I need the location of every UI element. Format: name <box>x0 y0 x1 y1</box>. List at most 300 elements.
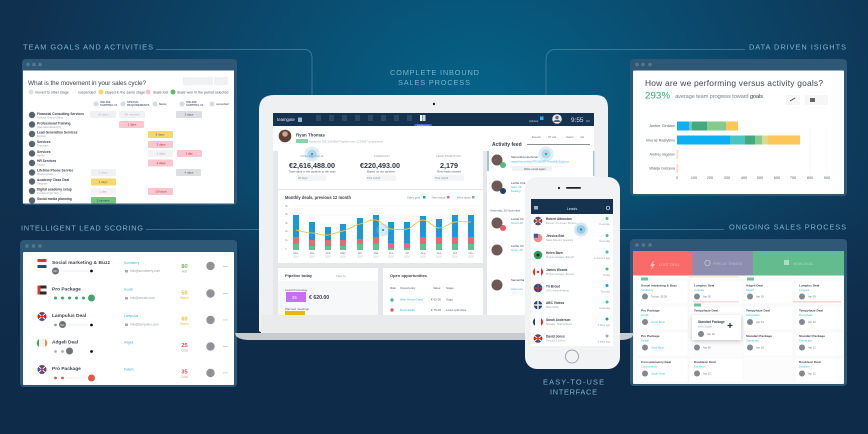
KPI panel <box>278 151 483 189</box>
laptop lid <box>259 95 608 332</box>
pipeline today card: 26 <box>292 295 297 300</box>
hotspot: chart <box>376 224 390 236</box>
stacked bar chart: Imuras Raslytinis <box>646 138 675 142</box>
stacked bar chart: 200 <box>707 176 713 180</box>
panel: ongoing sales process <box>630 239 847 386</box>
activity feed: Group 28 <box>511 221 523 225</box>
monthly deals chart: Monthly deals, previous 12 month <box>285 195 351 200</box>
deal rows: 3 days <box>157 142 166 146</box>
KPI panel: 30 days <box>298 176 308 180</box>
activity feed <box>487 126 594 315</box>
app navigation bar <box>273 113 594 128</box>
lead row: pro package lost <box>38 365 228 382</box>
monthly deals chart: 1k <box>285 238 289 242</box>
lead row: adgeli deal: Cold <box>181 348 188 352</box>
activity feed: Lucille Ch <box>511 244 524 248</box>
deal cards <box>637 276 843 382</box>
lead list: Tri Broud <box>546 284 560 288</box>
deal cards: Standart Package <box>746 334 772 338</box>
lead list: A moment ago <box>594 257 611 260</box>
lead list: Friday <box>603 274 611 277</box>
floating dragged card: Apr 19 <box>707 332 715 336</box>
deal rows: 4 days <box>99 180 108 184</box>
lead row: pro package lost: Cold <box>181 375 188 379</box>
lead list: Sarah Anderson <box>546 318 571 322</box>
monthly deals chart: Sep <box>437 251 442 255</box>
deal rows <box>29 111 202 204</box>
lead row: lampulus deal: info@lampulus.com <box>130 322 159 326</box>
lead list: Jessica Biel <box>546 234 564 238</box>
deal cards: Adgeli Deal <box>746 284 763 288</box>
floating dragged card <box>692 315 741 340</box>
deal rows: Academy Class Deal <box>37 178 69 182</box>
KPI panel: €2,616,488.00 <box>289 161 335 170</box>
hotspot: activity feed <box>538 146 554 162</box>
monthly deals chart: 2016 <box>468 256 474 258</box>
activity feed: Lucille Ch <box>511 217 524 221</box>
lead list: CFO, Asher/Kinkrest <box>546 290 569 292</box>
monthly deals chart: Jul <box>405 251 409 255</box>
deal cards: Pro Package <box>641 334 660 338</box>
KPI panel: Based on our pipeline <box>367 170 395 174</box>
phone screen <box>531 199 613 346</box>
KPI panel: 2,179 <box>440 161 458 170</box>
deal cards: Doubleon <box>799 364 811 368</box>
monthly deals chart: Jun <box>389 251 394 255</box>
open opportunities card: Sugs <box>446 298 453 302</box>
open opportunities card: Value <box>433 286 441 290</box>
legend <box>28 90 228 94</box>
stacked bar chart: 800 <box>807 176 813 180</box>
activity feed: 37 n/a <box>548 135 556 139</box>
deal cards: Lumplus <box>694 288 705 292</box>
column headers: SHIPPING #1 <box>100 103 118 107</box>
lead list: 3 days ago <box>598 324 611 327</box>
lead row: pro package: Pro Package <box>52 286 81 292</box>
hotspot: phone list <box>574 222 588 236</box>
lead row: pro package lost: Fatwin <box>124 368 134 372</box>
monthly deals chart: Jan <box>310 251 315 255</box>
monthly deals chart: New leads <box>432 196 446 200</box>
deal rows: Professional Training <box>37 122 71 126</box>
heading: ongoing sales process: ONGOING SALES PROCESS <box>729 222 846 232</box>
deal rows: 30 minutes <box>125 112 140 116</box>
deal rows: Toyseque <box>37 144 49 148</box>
activity feed: Write email again <box>524 167 546 171</box>
open opportunities card <box>383 268 483 315</box>
lead row: adgeli deal: 25 <box>181 343 188 349</box>
deal cards: Standart Package <box>799 334 825 338</box>
deal cards: Gamepack <box>799 338 813 342</box>
lead row: lampulus deal: Warm <box>180 322 189 326</box>
phone header <box>531 199 613 214</box>
heading: team goals and activities: TEAM GOALS AND ACTIVITIES <box>23 42 153 52</box>
deal cards: Apr 12 <box>808 372 816 376</box>
chart buttons <box>786 95 828 105</box>
heading: complete inbound sales process: COMPLETE INBOUND <box>390 68 479 77</box>
pipeline today card: Pipeline today <box>285 273 313 278</box>
lead row: social marketing: Sundberry <box>124 261 140 265</box>
stage header: won deal <box>753 251 844 276</box>
lead list: Speaker, Total Systems <box>546 323 573 326</box>
pipeline today card <box>278 268 378 315</box>
lead list: 5 days ago <box>598 340 611 344</box>
pipeline today card: € 620.00 <box>309 295 329 301</box>
lead list: ABC Videos <box>546 301 564 305</box>
deal rows: Fastplan <box>37 182 48 186</box>
lead row: lampulus deal <box>38 312 228 328</box>
open opportunities card: Opportunity <box>400 286 416 290</box>
column headers: SHIPPING #2 <box>186 103 204 107</box>
deal cards: Tomorr. 20:28 <box>651 294 667 298</box>
deal cards: Social marketing & Buzz <box>641 284 677 288</box>
lead list: Project manager, Beleyfit <box>546 256 574 259</box>
deal cards: Tempyhaze Deal <box>799 308 823 312</box>
column headers: cancelled <box>216 102 229 106</box>
deal rows: 10 hours <box>155 190 167 194</box>
hotspot: pipeline value <box>304 146 320 162</box>
deal rows: 3 days <box>99 170 108 174</box>
stage header: lost deal <box>633 251 692 276</box>
deal cards: Apr 12 <box>808 346 816 350</box>
monthly deals chart: 0 <box>285 247 287 251</box>
monthly deals chart: Aug <box>421 251 426 255</box>
deal rows: Bizcorp <box>37 134 46 138</box>
profile header <box>273 126 487 151</box>
monthly deals chart: 2016 <box>420 256 426 258</box>
stacked bar chart: 300 <box>724 176 730 180</box>
KPI panel: FORECAST <box>374 154 390 158</box>
heading: intelligent lead scoring: INTELLIGENT LEAD SCORING <box>21 224 143 232</box>
open opportunities card: Risk <box>390 286 396 290</box>
monthly deals chart: 2016 <box>404 256 410 258</box>
monthly deals chart: 2k <box>285 229 289 233</box>
monthly deals chart: 3k <box>285 221 289 225</box>
deal rows: 1 minutes <box>96 198 110 202</box>
monthly deals chart: Apr <box>358 251 362 255</box>
progress caption: average team progress toward goals <box>675 94 763 100</box>
profile header: Achieved 321/1234566 Pipeline won 1234567 guaranteed <box>309 140 384 144</box>
phone header: Leads <box>567 206 577 211</box>
activity feed: Activity feed <box>492 142 522 148</box>
lead list: James Woods <box>546 268 568 272</box>
KPI panel: €220,493.00 <box>360 161 400 170</box>
app navigation bar: AM <box>586 120 590 123</box>
toolbar buttons <box>183 77 228 85</box>
deal cards: Doubleon Deal <box>694 360 716 364</box>
activity feed: Gone: 28 <box>511 248 523 252</box>
deal rows: 8 days <box>156 132 165 136</box>
monthly deals chart: 2016 <box>293 256 299 258</box>
panel title: How are we performing versus activity goals? <box>645 78 823 88</box>
lead list: Banner, On Ocean, Bimono <box>546 222 577 225</box>
column headers <box>94 100 229 107</box>
deal cards: Consumatory <box>641 364 658 368</box>
activity feed: n/a <box>580 135 584 139</box>
deal cards: Sundberry <box>641 288 654 292</box>
stacked bar chart <box>646 122 830 180</box>
deal cards: Lumplus Deal <box>799 284 819 288</box>
deal cards: Doubleon <box>694 364 706 368</box>
monthly deals chart: 2016 <box>309 256 315 258</box>
heading: easy-to-use interface: EASY-TO-USE <box>543 378 604 386</box>
panel: intelligent lead scoring <box>20 240 237 387</box>
app screen <box>273 113 594 315</box>
monthly deals chart: 2016 <box>325 256 331 258</box>
profile header: Ryan Thomas <box>296 132 325 138</box>
deal cards: Apr 10 <box>808 320 816 324</box>
lead list: Yesterday <box>599 307 611 310</box>
monthly deals chart: 2016 <box>340 256 346 258</box>
deal cards: Adgeli <box>746 288 754 292</box>
deal rows: Services <box>37 150 51 154</box>
activity feed: www.com <box>511 287 524 291</box>
column headers: SPECIAL <box>127 100 139 104</box>
panel: data driven insights <box>630 59 847 196</box>
monthly deals chart: 5k <box>285 204 289 208</box>
monthly deals chart: Wins deals <box>457 196 471 200</box>
lead list: Robert Atkinston <box>546 217 572 221</box>
lead row: social marketing: Dn <box>54 269 58 273</box>
monthly deals chart <box>278 190 483 263</box>
deal rows: Falcon <box>37 162 46 166</box>
lead row: lampulus deal: 60 <box>181 316 188 322</box>
floating dragged card: Web Studio <box>698 324 712 328</box>
progress percentage: 293% <box>645 90 670 102</box>
column headers: REQUIREMENTS <box>127 103 150 107</box>
lead list: Yesterday <box>599 240 611 243</box>
open opportunities card: € 62.00 <box>431 298 441 302</box>
column headers: ONLINE <box>186 100 197 104</box>
deal rows: Fortune Group Global <box>37 116 63 120</box>
deal rows: 2 days <box>157 161 166 165</box>
deal cards: Jacob Gone <box>651 372 666 376</box>
KPI panel: New leads created <box>437 170 461 174</box>
lead row: pro package: info@accab.com <box>130 296 155 300</box>
deal cards: Tempyhaze Deal <box>694 308 718 312</box>
deal rows: Roamingcorp <box>37 172 53 176</box>
monthly deals chart: 2016 <box>373 256 379 258</box>
legend: stayed in the same stage <box>105 90 145 94</box>
app navigation bar: Dashboard <box>417 125 429 128</box>
heading: easy-to-use interface: INTERFACE <box>550 388 597 396</box>
stacked bar chart: Amber Gintiare <box>649 124 675 128</box>
lead list: Project manager, Beyond <box>546 273 575 276</box>
monthly deals chart: 4k <box>285 212 289 216</box>
deal cards: Fatwin <box>641 338 649 342</box>
phone <box>525 177 620 369</box>
activity feed: Dealing <box>511 189 521 193</box>
monthly deals chart: 2016 <box>452 256 458 258</box>
monthly deals chart: 2016 <box>436 256 442 258</box>
deal rows: 1 day <box>185 152 193 156</box>
stacked bar chart: 0 <box>676 176 678 180</box>
deal rows: Lead Generation Services <box>37 130 78 134</box>
column headers: ONLINE <box>100 100 111 104</box>
lead list: Helen Barn <box>546 251 563 255</box>
deal rows: 1 days <box>157 152 166 156</box>
deal rows: 4 days <box>185 170 194 174</box>
lead row: adgeli deal <box>37 338 228 354</box>
lead row: social marketing <box>38 259 228 274</box>
open opportunities card: Lead optimizes <box>446 308 467 312</box>
column headers: Name <box>159 102 167 106</box>
lead list: Tuesday <box>600 290 611 294</box>
panel title: What is the movement in your sales cycle? <box>28 80 146 87</box>
monthly deals chart: 2016 <box>357 256 363 258</box>
lead row: pro package <box>38 286 228 302</box>
heading: complete inbound sales process <box>390 68 479 87</box>
app navigation bar: Advisor <box>529 119 538 123</box>
pipeline today card: Filter by <box>336 274 347 278</box>
activity feed: Events <box>532 135 541 139</box>
laptop base <box>235 333 634 340</box>
activity feed: Samantha <box>511 278 525 282</box>
activity feed: Sent: 28 <box>511 185 522 189</box>
lead row: pro package: 50 <box>181 290 188 296</box>
deal cards: Gamepack <box>746 338 760 342</box>
stage header: won deal: WON DEAL <box>793 262 813 266</box>
deal cards: Apr 06 <box>703 294 711 298</box>
app navigation bar: teamgate <box>277 117 296 122</box>
stacked bar chart: 900 <box>824 176 830 180</box>
deal rows: 20 days <box>98 112 109 116</box>
panel: team goals and activities <box>22 59 237 205</box>
deal rows: Internationalised Pty <box>37 125 62 129</box>
legend: suspended <box>78 90 96 94</box>
deal cards: Apr 09 <box>808 294 816 298</box>
legend: deals won in the period selected <box>177 90 228 94</box>
deal cards: Apr 12 <box>703 372 711 376</box>
lead list: Mark Smith <box>546 306 559 309</box>
open opportunities card: Web House Deal <box>400 298 423 302</box>
pipeline today card: Lead Processing <box>285 288 308 292</box>
floating dragged card: Standart Package <box>698 320 725 324</box>
monthly deals chart: Nov <box>469 251 474 255</box>
deal cards: Lumplus Deal <box>694 284 714 288</box>
lead row: pro package: Warm <box>180 296 189 300</box>
stage header: lost deal: LOST DEAL <box>659 263 680 267</box>
home button <box>566 350 578 363</box>
deal rows: Fundamental Tech <box>37 191 60 195</box>
lead list: Yesterday <box>599 223 611 226</box>
open opportunities card: € 75.00 <box>431 308 441 312</box>
open opportunities card: Open opportunities <box>390 273 428 278</box>
deal cards: Pro Package <box>641 308 660 312</box>
KPI panel: LEAD INVENTORY <box>436 154 462 158</box>
deal cards: Tempyhaze <box>799 313 813 317</box>
KPI panel: This month <box>435 176 449 180</box>
stacked bar chart: 400 <box>741 176 747 180</box>
lead row: lampulus deal: Dn <box>60 323 65 327</box>
lead row: social marketing: Social marketing & Buzz <box>52 260 111 266</box>
deal rows: Social media planning <box>37 197 72 201</box>
lead row: lampulus deal: Lampulus Deal <box>52 313 86 319</box>
lead list: Sales Director, Academy <box>546 239 574 242</box>
deal cards: Apr 14 <box>756 320 764 324</box>
activity feed: Samantha Hochman <box>511 155 539 159</box>
deal cards: Good Boon <box>651 346 665 350</box>
open opportunities card: Stage <box>446 286 454 290</box>
heading: easy-to-use interface <box>543 378 604 396</box>
heading: complete inbound sales process: SALES PROCESS <box>398 78 470 87</box>
monthly deals chart: Sales goal <box>407 196 420 200</box>
lead row: pro package: Accab <box>124 288 133 292</box>
legend: deals lost <box>153 90 168 94</box>
lead list: Director & Zummi <box>546 340 566 342</box>
deal cards: Tempyhaze Deal <box>746 308 770 312</box>
lead row: lampulus deal: Lampulus <box>124 314 139 318</box>
KPI panel: Total value in the pipeline to the start <box>289 170 336 174</box>
stacked bar chart: 100 <box>691 176 697 180</box>
stage header: pipe at things <box>692 251 753 276</box>
lead row: pro package lost: 35 <box>181 370 188 376</box>
pipeline today card: Planned meetings <box>285 307 310 311</box>
connector lines <box>146 50 745 230</box>
deal cards: Junior Boon <box>651 320 665 324</box>
deal rows: Lifetime Phone Service <box>37 168 73 172</box>
monthly deals chart: Dec <box>294 251 299 255</box>
deal cards: Accab <box>641 313 649 317</box>
stage header: pipe at things: PIPE AT THINGS <box>713 262 743 266</box>
deal rows: Digital academy setup <box>37 188 72 192</box>
lead row: adgeli deal: Adgeli <box>124 340 133 344</box>
activity feed: regarding review PROSKEIT Kinetikfit Express <box>511 160 569 164</box>
activity feed: Users <box>566 135 574 139</box>
lead row: social marketing: Hot <box>182 270 187 274</box>
lead row: social marketing: info@sundberry.com <box>130 269 160 273</box>
monthly deals chart: Feb <box>326 251 331 255</box>
deal cards: Consummatory Deal <box>641 360 671 364</box>
KPI panel: This month <box>367 176 381 180</box>
deal rows: 2 days <box>185 112 194 116</box>
monthly deals chart: Mar <box>374 251 378 255</box>
stacked bar chart: 600 <box>774 176 780 180</box>
activity feed: Yesterday, 26 November <box>490 208 521 212</box>
stacked bar chart: 700 <box>790 176 796 180</box>
deal rows: Financial Consulting Services <box>37 112 84 116</box>
stacked bar chart: Andrej Jagarov <box>649 152 675 156</box>
legend: moved to other stage <box>35 90 69 94</box>
lead row: adgeli deal: Adgeli Deal <box>52 340 78 346</box>
deal cards: Tempyhaze <box>746 313 760 317</box>
open opportunities card: Dosmitdahl <box>400 308 415 312</box>
deal cards: Lumplus <box>799 288 810 292</box>
stacked bar chart: 500 <box>757 176 763 180</box>
stacked bar chart: Vitalija Golceva <box>649 166 676 170</box>
deal cards: Apr 10 <box>756 346 764 350</box>
deal rows: 1 days <box>128 122 137 126</box>
deal cards: Apr 19 <box>756 294 764 298</box>
deal cards: Apr 09 <box>703 346 711 350</box>
lead list <box>533 217 611 344</box>
deal rows: Services <box>37 140 51 144</box>
lead list: David Jones <box>546 334 565 338</box>
KPI panel: PIPELINE VALUE <box>300 154 324 158</box>
lead row: social marketing: 80 <box>181 264 188 270</box>
deal cards: Doubleon Deal <box>799 360 821 364</box>
app navigation bar: 9:55 <box>571 117 584 124</box>
deal rows: 1 day <box>99 190 107 194</box>
deal rows: Aprilio <box>37 154 45 158</box>
activity feed: Lucille Cha <box>511 181 526 185</box>
monthly deals chart: 2016 <box>388 256 394 258</box>
deal rows: HR Services <box>37 159 56 163</box>
lead row: pro package lost: Pro Package <box>52 366 81 372</box>
laptop <box>235 95 634 340</box>
monthly deals chart: May <box>340 251 346 255</box>
monthly deals chart: Oct <box>453 251 457 255</box>
